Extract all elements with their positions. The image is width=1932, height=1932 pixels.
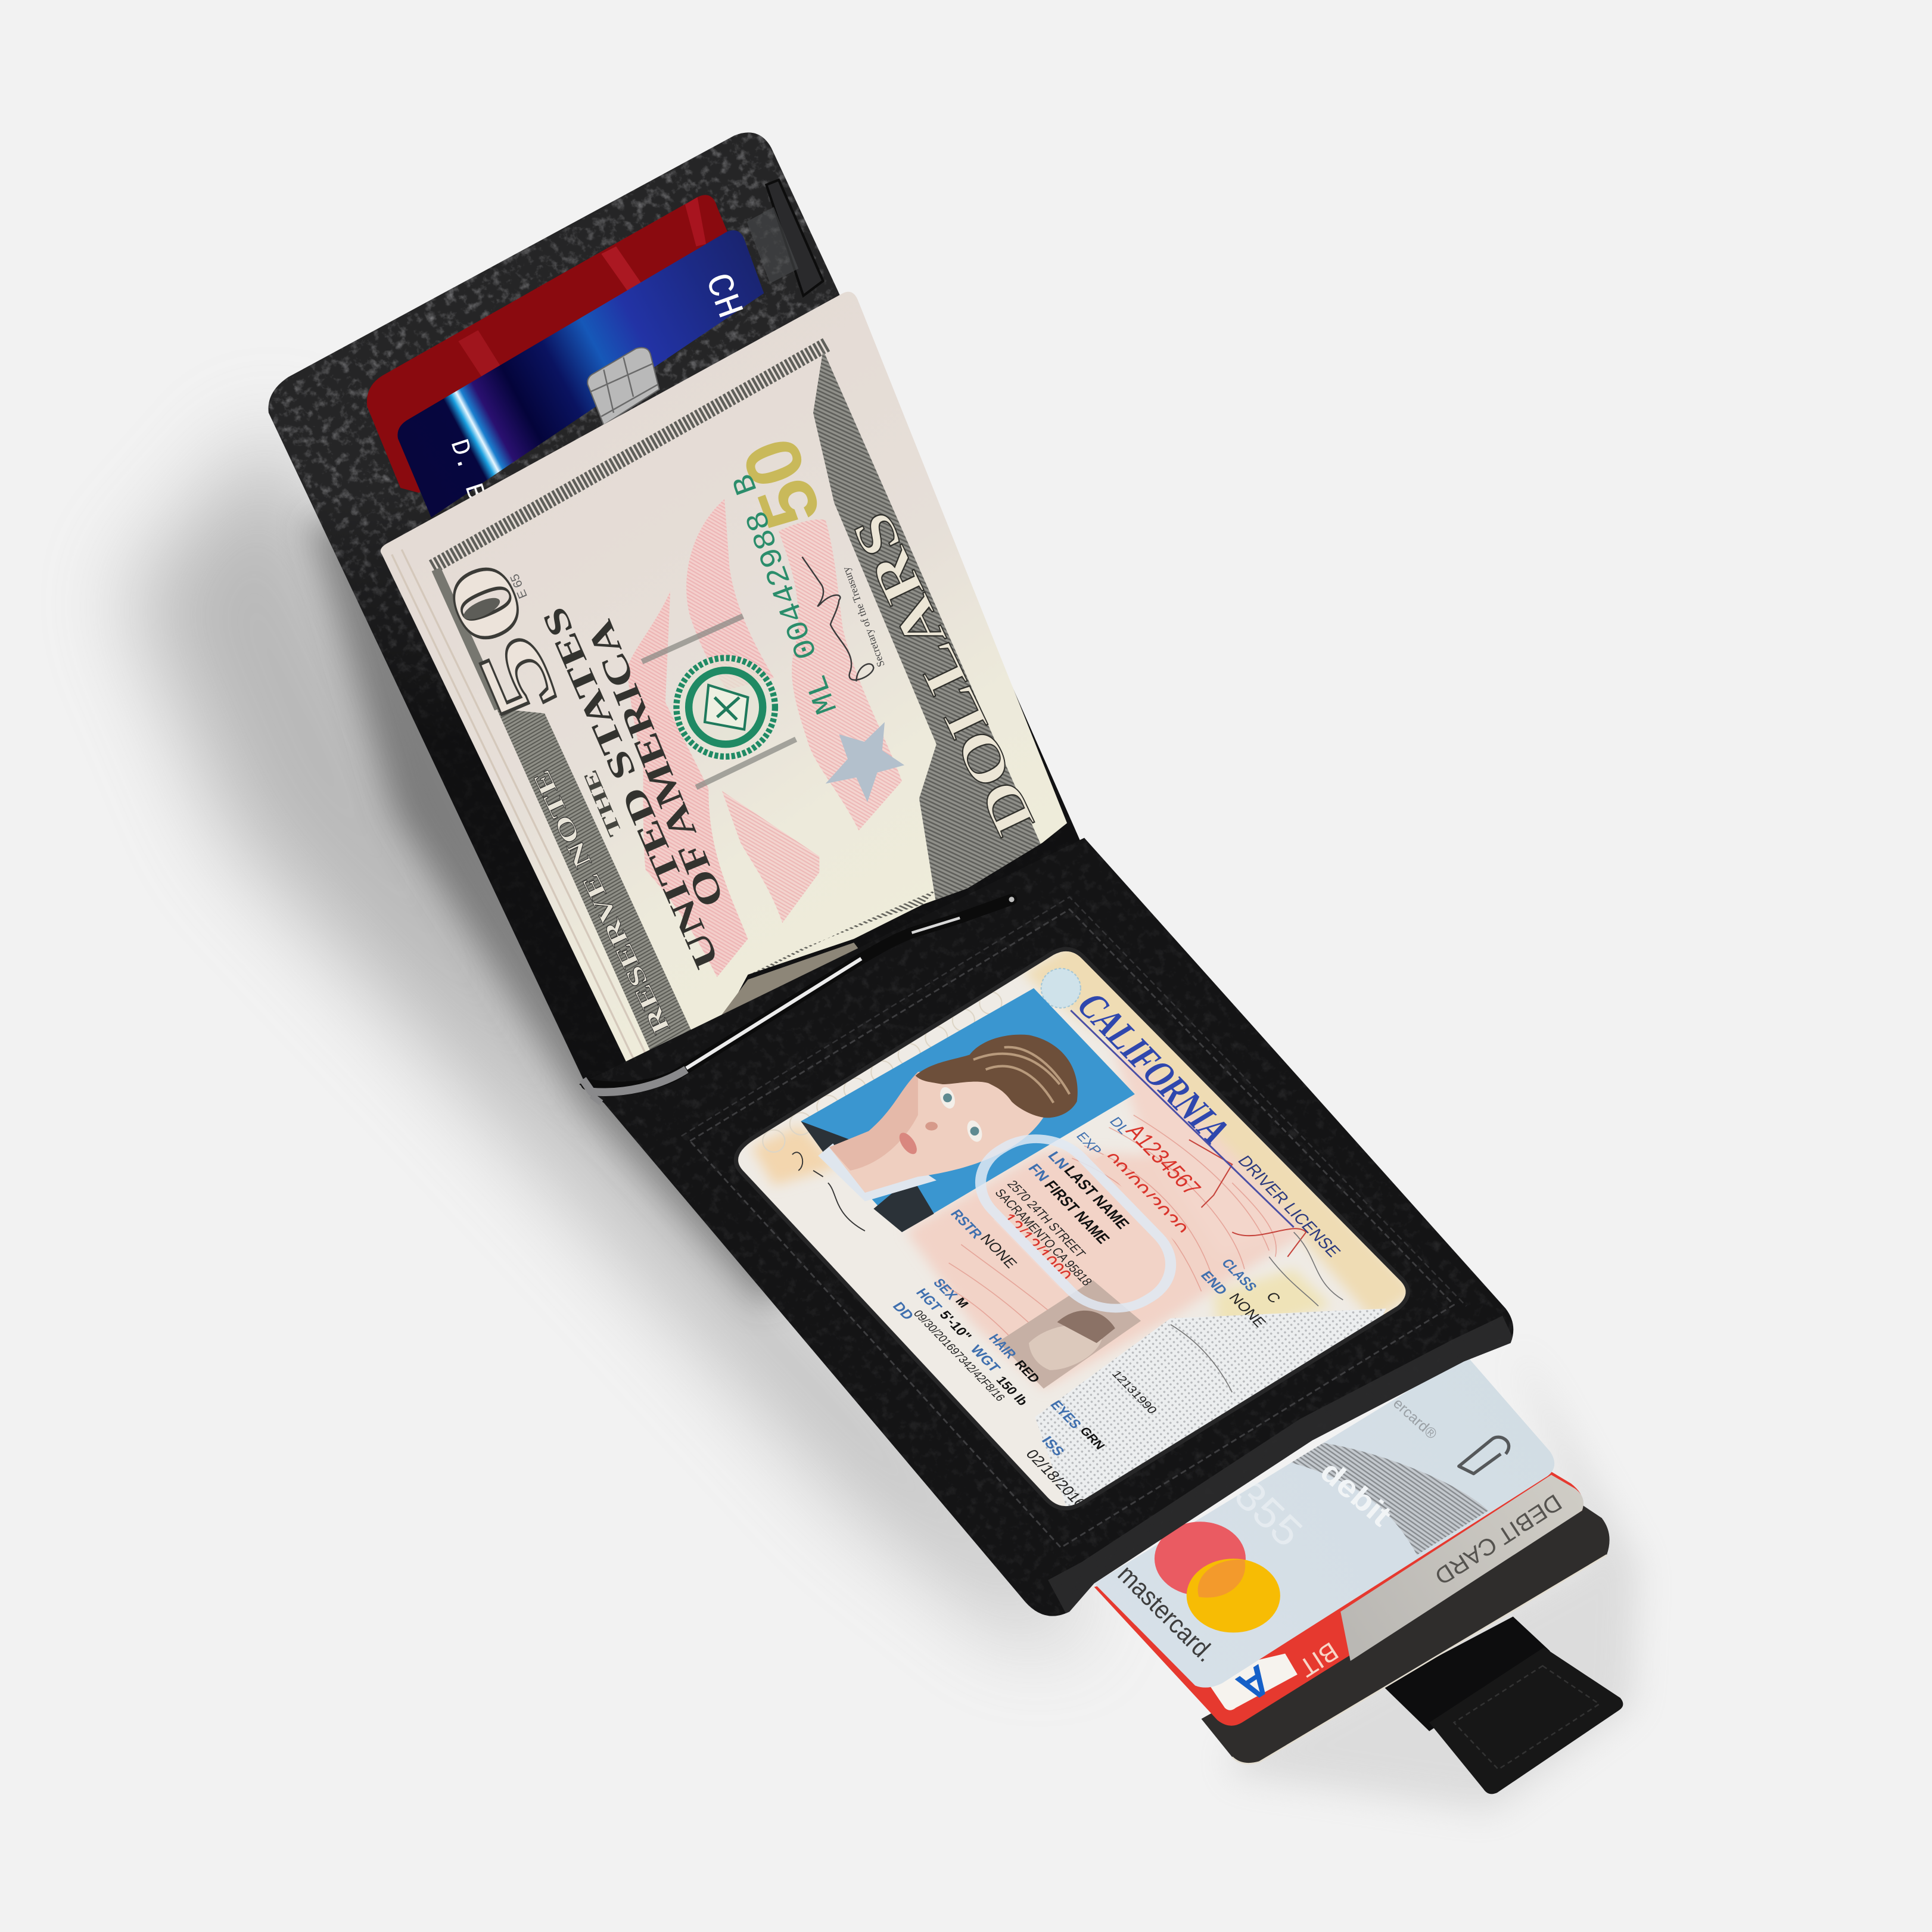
silver highlight (686, 959, 861, 1068)
cardholder name: D. B (443, 436, 490, 504)
gap under bill (659, 942, 861, 1078)
elastic strap (1383, 1617, 1550, 1731)
grey band (1340, 1475, 1583, 1661)
id fields: END (1197, 1269, 1231, 1298)
id fields (889, 1115, 1283, 1511)
star (826, 722, 904, 802)
lips (896, 1130, 920, 1157)
wallet lower panel (579, 826, 1528, 1626)
id fields: 02/18/2016 (1022, 1447, 1090, 1511)
red card (367, 195, 729, 493)
id fields: ISS (1038, 1434, 1068, 1458)
signatures (802, 557, 873, 682)
blue backdrop (801, 988, 1135, 1232)
id fields: RED (1012, 1358, 1043, 1385)
black card (1202, 1505, 1610, 1763)
photo (801, 988, 1135, 1232)
big 50 numeral: 50 (424, 548, 577, 733)
mastercard wordmark: mastercard. (1112, 1560, 1220, 1667)
hair (916, 1035, 1078, 1118)
DEBIT CARD label: DEBIT CARD (1430, 1489, 1566, 1590)
federal reserve note text: RESERVE NOTE (527, 766, 675, 1038)
id fields: C (1262, 1290, 1283, 1306)
id fields: NONE (976, 1232, 1020, 1271)
BIT text: BIT (1294, 1637, 1343, 1682)
wallet upper panel (259, 123, 1097, 1109)
debit card (1094, 1469, 1583, 1726)
id fields: DD (889, 1299, 917, 1323)
id fields: LAST NAME (1060, 1163, 1133, 1231)
signature (792, 1152, 865, 1231)
stitching (690, 909, 1454, 1548)
red dates half hidden: 12/12/1990 (994, 1209, 1077, 1286)
debit word: debit (1314, 1454, 1398, 1533)
id fields: NONE (1225, 1291, 1269, 1330)
id fields: 150 lb (993, 1374, 1031, 1408)
crumpled bottom engraving (721, 889, 937, 1025)
serial number: ML 00442988 B (726, 469, 845, 718)
worn card slot edge (1060, 1338, 1513, 1602)
id fields: EXP (1073, 1130, 1105, 1157)
dotted lower area (1035, 1308, 1386, 1516)
id fields: 09/30/201697342/42F8/16 (910, 1308, 1007, 1404)
the text: THE (580, 766, 627, 839)
embossed number: 355 (1226, 1471, 1311, 1555)
window frame (738, 951, 1406, 1506)
DRIVER LICENSE: DRIVER LICENSE (1234, 1153, 1344, 1260)
concentric security circles (763, 992, 1001, 1152)
CH bank name: CH (695, 268, 750, 324)
seal (1041, 969, 1081, 1008)
portrait frame bars (642, 616, 796, 788)
id fields: SACRAMENTO,CA 95818 (992, 1187, 1096, 1288)
cast shadow (129, 425, 1639, 1811)
pocket ribs (766, 180, 823, 295)
treasury caption: Secretary of the Treasury (839, 565, 887, 668)
clip tip (1009, 897, 1015, 902)
driver license (727, 939, 1417, 1522)
chip (587, 348, 659, 425)
id fields: 5'-10" (937, 1308, 975, 1343)
blue bank card (397, 230, 764, 518)
mastercard circles (1155, 1522, 1280, 1632)
guilloche lines (937, 1115, 1276, 1377)
jacket (801, 1121, 934, 1232)
nose (925, 1122, 938, 1131)
id fields: EYES (1047, 1398, 1084, 1431)
leather tab (1429, 1647, 1623, 1794)
50 side border (436, 570, 499, 708)
stacked bill edges (392, 549, 658, 1084)
id fields: GRN (1077, 1425, 1107, 1452)
treasury seal (674, 655, 777, 759)
dark clip body (586, 900, 1012, 1087)
of america text: OF AMERICA (579, 614, 732, 913)
pink line engraving (627, 499, 902, 977)
the united states text: UNITED STATES (534, 602, 727, 975)
neck and face (829, 1063, 1076, 1193)
red dates half hidden (993, 1149, 1193, 1289)
line art landscape (1171, 1232, 1343, 1392)
red dates half hidden: 09/09/2020 (1096, 1149, 1193, 1240)
small plate text: E 65 (508, 572, 530, 601)
DOLLARS text: DOLLARS (839, 503, 1046, 845)
id fields: DL (1106, 1115, 1133, 1137)
blue letter A: A (1229, 1656, 1280, 1712)
card brand mark (1459, 1437, 1509, 1474)
top engraved border (433, 344, 828, 567)
mastercard small text: ercard® (1390, 1395, 1440, 1443)
clear elastic ring (959, 1121, 1193, 1326)
id fields: SEX (930, 1276, 960, 1302)
pink flag waves (627, 499, 902, 977)
pull tab (1383, 1617, 1623, 1794)
money clip (583, 897, 1015, 1103)
folded fifty dollar bills (381, 292, 1067, 1084)
state outline (1189, 1140, 1306, 1257)
right engraved panel (813, 350, 1041, 906)
collar (818, 1143, 937, 1202)
white logo chip (1202, 1654, 1298, 1710)
face shadow (829, 1072, 918, 1171)
id fields: A1234567 (1121, 1120, 1206, 1199)
id fields: 12131990 (1109, 1368, 1159, 1416)
silver mastercard (1094, 1355, 1554, 1688)
california underline (1071, 1010, 1294, 1227)
id fields: FIRST NAME (1041, 1178, 1113, 1246)
id fields: 2570 24TH STREET (1004, 1178, 1089, 1260)
id fields: RSTR (947, 1207, 985, 1241)
id fields: HGT (913, 1286, 945, 1314)
gold 50: 50 (725, 427, 838, 539)
id fields: CLASS (1218, 1256, 1260, 1294)
left engraved panel (497, 708, 698, 1071)
CALIFORNIA title: CALIFORNIA (1067, 987, 1241, 1150)
guilloche swoosh (1281, 1442, 1488, 1555)
ghost photo (998, 1280, 1141, 1389)
wrap around fold (583, 1069, 686, 1092)
id fields: FN (1025, 1162, 1052, 1184)
eyes (937, 1085, 958, 1110)
id fields: HAIR (985, 1331, 1019, 1361)
id fields: WGT (967, 1343, 1004, 1375)
id fields: M (953, 1296, 971, 1310)
id fields: LN (1044, 1149, 1072, 1172)
